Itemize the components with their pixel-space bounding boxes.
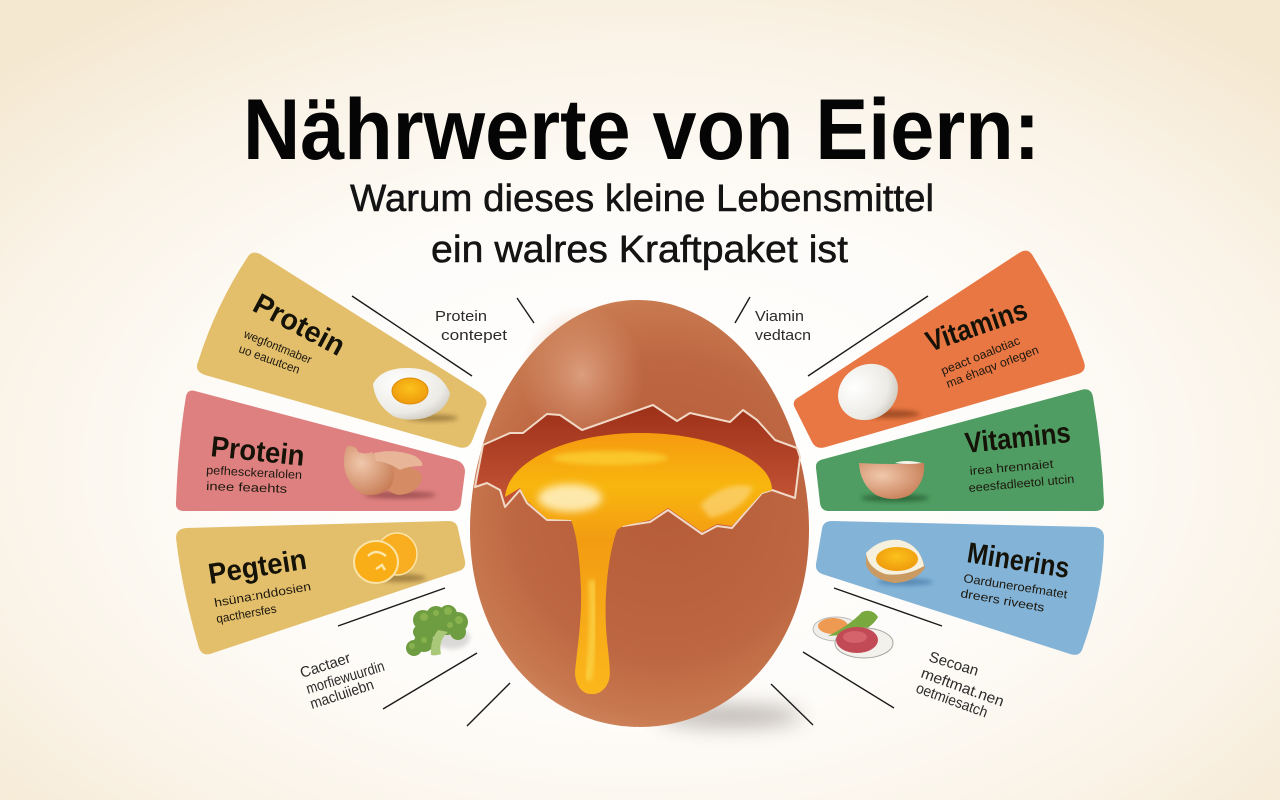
subtitle [350,178,934,271]
callout: protein content [435,308,508,344]
panel: vitamins green [816,389,1104,511]
panel: vitamins green: irea hrennaiet [969,457,1055,478]
callout: protein content: Protein [435,308,487,325]
callout: vitamin: vedtacn [755,327,811,344]
subtitle: ein walres Kraftpaket ist [431,229,848,271]
panel: minerins blue: dreers riveets [959,586,1046,615]
yolk with drip [505,433,772,694]
panel: minerins blue: Minerins [965,537,1072,585]
panel: pegtein yellow bottom: qacthersfes [215,602,278,626]
pointer lines [338,296,942,726]
panel: pegtein yellow bottom: hsüna:nddosien [213,579,312,610]
icon: white egg [827,353,920,431]
shell highlight [520,305,644,445]
callout: lower right [914,649,1006,721]
panel: vitamins green: eeesfadleetol utcin [968,472,1075,495]
panel: protein pink: pefhesckeralolen [206,463,302,482]
panel: protein pink [176,391,465,511]
callout: lower left: macluiiebn [308,676,376,713]
callout: lower right: Secoan [927,649,981,680]
panel: vitamins orange [794,251,1085,448]
callout: lower left: morfiewuurdin [304,658,387,698]
panel: protein yellow top: uo eauutcen [237,342,302,377]
callout: vitamin [755,308,811,344]
egg shadow [658,705,802,727]
panel: protein yellow top: wegfontmaber [241,326,314,367]
panel: protein pink: inee feaehts [206,479,287,496]
yolk highlights [538,484,602,512]
title: Nährwerte von Eiern: [243,82,1040,178]
panel: protein pink: Protein [209,431,306,473]
callout: lower left [298,650,387,713]
panel: protein yellow top [197,253,487,448]
panel: vitamins green: Vitamins [963,417,1072,460]
icon: boiled egg half [373,368,458,422]
panel: protein yellow top: Protein [248,288,350,363]
title [243,82,1040,271]
callout: lower left: Cactaer [298,650,353,682]
icon: broken egg shell [344,446,436,498]
panel: pegtein yellow bottom [176,521,465,654]
panel: pegtein yellow bottom: Pegtein [206,544,309,591]
callout: protein content: contepet [441,327,508,344]
panel: minerins blue: Oarduneroefmatet [963,571,1069,602]
egg shell [470,300,809,727]
panel: minerins blue [816,521,1104,655]
callout: vitamin: Viamin [755,308,804,325]
subtitle: Warum dieses kleine Lebensmittel [350,178,934,220]
central cracked egg [470,300,809,727]
icon: broccoli [406,605,470,656]
panel: vitamins orange: ma éhaqv orlegen [944,343,1041,391]
panel: vitamins orange: Vitamins [922,294,1032,359]
icon: soft boiled egg [866,540,933,586]
icon: egg shell bowl [859,461,929,502]
crack opening [475,405,800,534]
callout: lower right: meftmat.nen [919,665,1006,711]
icon: plate with food [813,611,893,658]
icon: orange slices [354,533,426,583]
broccoli stem [431,630,448,655]
panel: vitamins orange: peact oaalotiac [939,333,1022,378]
callout: lower right: oetmiesatch [914,680,990,721]
